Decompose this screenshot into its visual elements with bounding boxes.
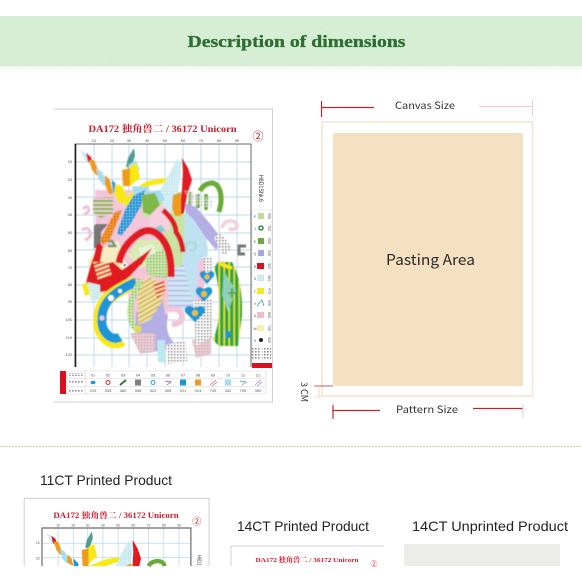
panel: 14CT printed product preview <box>231 546 384 568</box>
axis numbers: 50 <box>68 230 73 235</box>
bottom symbol legend: 024 <box>195 388 202 393</box>
axis numbers: 30 <box>68 195 73 200</box>
bottom symbol legend: 336 <box>135 388 142 393</box>
panel: 11CT printed product preview: 20 <box>71 523 75 527</box>
pattern size label: Pattern Size <box>396 401 459 416</box>
axis numbers: 90 <box>68 299 73 304</box>
right colour legend: J <box>254 227 256 231</box>
axis numbers <box>66 138 240 357</box>
axis numbers: 70 <box>199 138 204 143</box>
bottom symbol legend: 10 <box>226 372 231 378</box>
panel: 14CT unprinted canvas swatch <box>404 544 560 566</box>
pasting area <box>333 133 523 386</box>
label: 14CT unprinted: 14CT Unprinted Product <box>412 518 568 534</box>
right colour legend: S <box>254 277 257 281</box>
axis numbers: 20 <box>68 177 73 182</box>
panel: 11CT printed product preview: 70 <box>147 523 151 527</box>
panel: canvas size diagram <box>298 97 532 419</box>
panel: 11CT printed product preview: ② <box>192 517 201 527</box>
bottom symbol legend: 12 <box>256 372 261 378</box>
axis numbers: 80 <box>68 282 73 287</box>
right colour legend: 996 <box>267 300 271 306</box>
axis numbers: 20 <box>110 138 115 143</box>
bottom symbol legend: 380 <box>120 388 127 393</box>
axis numbers: 40 <box>68 212 73 217</box>
right colour legend: 973 <box>267 288 271 294</box>
right colour legend: K <box>254 240 257 244</box>
right colour legend: X <box>254 339 257 343</box>
bottom symbol legend: 01 <box>91 372 96 378</box>
right colour legend <box>252 210 272 368</box>
bottom symbol legend: 342 <box>225 388 232 393</box>
panel: 11CT printed product preview: 40 <box>101 523 105 527</box>
bottom symbol legend: 021 <box>180 388 187 393</box>
panel: 11CT printed product preview: H6D1 <box>196 555 202 565</box>
right colour legend: 321 <box>267 263 271 269</box>
right colour legend: 702 <box>267 225 271 231</box>
panel: 11CT printed product preview: 10 <box>36 541 40 545</box>
axis numbers: 90 <box>235 138 240 143</box>
axis numbers: 60 <box>68 248 73 253</box>
panel: 14CT printed product preview: DA172 独角兽二 / 36172 Unicorn <box>256 555 359 564</box>
panel: 11CT printed product preview: 60 <box>131 523 135 527</box>
right colour legend: Q <box>254 252 257 256</box>
bottom symbol legend: 333 <box>105 388 112 393</box>
label: 14CT printed: 14CT Printed Product <box>237 518 369 534</box>
bottom symbol legend: 322 <box>150 388 157 393</box>
panel: unicorn cross stitch chart <box>54 109 272 402</box>
right colour legend: R <box>254 265 257 269</box>
axis numbers: 80 <box>217 138 222 143</box>
axis numbers: 110 <box>66 335 73 340</box>
right colour legend: 905 <box>267 238 271 244</box>
header band <box>0 16 582 71</box>
panel: 11CT printed product preview: 30 <box>86 523 90 527</box>
panel: 11CT printed product preview: 90 <box>177 523 181 527</box>
bottom symbol legend: 07 <box>181 372 186 378</box>
right colour legend: 906 <box>267 213 271 219</box>
axis numbers: 100 <box>66 317 73 322</box>
axis numbers: 10 <box>92 138 97 143</box>
bottom symbol legend <box>60 371 266 394</box>
bottom symbol legend: 04 <box>136 372 141 378</box>
canvas outline <box>322 122 532 396</box>
axis numbers: 30 <box>127 138 132 143</box>
unicorn artwork <box>80 148 246 364</box>
right colour legend: 310 <box>267 337 271 343</box>
panel: 11CT printed product preview: 10 <box>56 523 60 527</box>
right colour legend: T <box>254 290 257 294</box>
bottom symbol legend: 03 <box>121 372 126 378</box>
bottom symbol legend: 02 <box>106 372 111 378</box>
margin marker <box>314 386 333 397</box>
bottom symbol legend: 06 <box>166 372 171 378</box>
bottom symbol legend: 09 <box>211 372 216 378</box>
bottom symbol legend: 305 <box>165 388 172 393</box>
dotted divider <box>0 446 582 448</box>
margin label 3 CM: 3 CM <box>298 382 311 402</box>
right colour legend: V <box>254 302 257 306</box>
axis numbers: 60 <box>181 138 186 143</box>
panel: 11CT printed product preview <box>24 498 209 566</box>
bottom symbol legend: 799 <box>240 388 247 393</box>
axis numbers: 10 <box>68 159 73 164</box>
bottom symbol legend: 11 <box>241 372 246 378</box>
bottom symbol legend: 219 <box>90 388 97 393</box>
panel: 11CT printed product preview: 50 <box>116 523 120 527</box>
bottom symbol legend: 749 <box>210 388 217 393</box>
axis numbers: 50 <box>163 138 168 143</box>
bottom symbol legend: 05 <box>151 372 156 378</box>
panel: 11CT printed product preview: 20 <box>36 556 40 560</box>
chart title: DA172 独角兽二 / 36172 Unicorn <box>88 123 237 135</box>
panel: 14CT printed product preview: ② <box>370 560 378 568</box>
right colour legend: 745 <box>267 325 271 331</box>
axis numbers: 70 <box>68 265 73 270</box>
pattern size arrow <box>333 404 523 419</box>
bottom symbol legend: 08 <box>196 372 201 378</box>
right colour legend: W <box>253 327 257 331</box>
right colour legend: 964 <box>267 275 271 281</box>
panel: 11CT printed product preview: 80 <box>162 523 166 527</box>
right colour legend: 605 <box>267 312 271 318</box>
pasting area label: Pasting Area <box>386 249 475 270</box>
canvas size label: Canvas Size <box>395 97 455 112</box>
right colour legend: U <box>254 314 257 318</box>
axis numbers: 120 <box>66 352 73 357</box>
vertical product code: H6D1Shk.6 <box>257 175 263 203</box>
right colour legend: 340 <box>267 250 271 256</box>
bottom symbol legend: 390 <box>255 388 262 393</box>
canvas size arrow <box>322 100 532 117</box>
panel: 11CT printed product preview: DA172 独角兽二 / 36172 Unicorn <box>53 510 179 520</box>
chart number badge: ② <box>252 130 264 143</box>
label: 11CT printed: 11CT Printed Product <box>40 472 172 488</box>
axis numbers: 40 <box>145 138 150 143</box>
heading: Description of dimensions <box>188 32 406 51</box>
right colour legend: P <box>254 215 257 219</box>
